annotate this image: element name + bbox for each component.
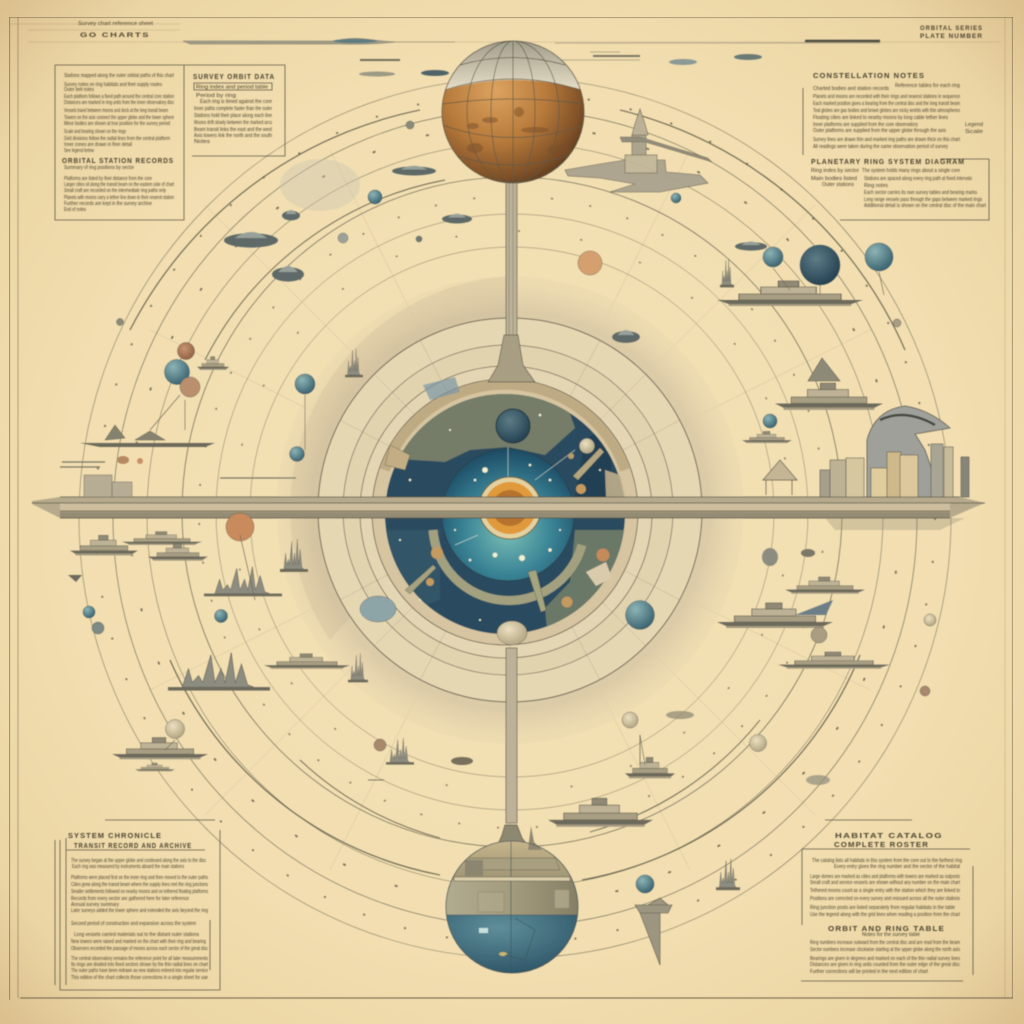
text panel: top left: Notes (194, 139, 211, 145)
text panel: bottom right: Small craft and service vessels are shown without any number on the main chart (810, 880, 961, 886)
text panel: top left: Each platform follows a fixed path around the central core station (64, 94, 174, 100)
text panel: top left (55, 65, 285, 220)
text panel: bottom left: Platforms were placed first on the inner ring and then moved to the outer paths (71, 875, 208, 881)
text panel: top left: Further records are kept in the survey archive (64, 201, 152, 207)
text panel: bottom right: The catalog lists all habitats in this system from the core out to the farthest ring (812, 858, 962, 864)
text panel: bottom left: Later surveys added the lower sphere and extended the axis beyond the ring (71, 908, 208, 914)
text panel: bottom right: Further corrections will be printed in the next edition of chart (810, 969, 929, 975)
text panel: top left: Grid divisions follow the radial lines from the central platform (64, 136, 170, 142)
header labels: PLATE NUMBER (920, 34, 983, 40)
left side ships (60, 357, 414, 771)
text panel: top left: Minor bodies are shown at true position for the survey period (64, 121, 170, 127)
text panel: top right: Legend (965, 122, 983, 128)
text panel: bottom right (801, 820, 973, 981)
text panel: bottom right: Notes for the survey table (862, 932, 920, 938)
text panel: top left: SURVEY ORBIT DATA (193, 74, 275, 81)
text panel: top right: CONSTELLATION NOTES (813, 73, 925, 80)
text panel: top left: Towers on the axis connect the upper globe and the lower sphere (64, 115, 174, 121)
text panel: top right: Main bodies listed (811, 176, 857, 182)
text panel: top left: Inner zones are drawn in finer detail (64, 142, 132, 148)
transit beam (32, 497, 985, 518)
text panel: bottom right: Sector numbers increase clockwise starting at the upper globe along the north axis (810, 947, 960, 953)
right side ships (548, 242, 890, 827)
header labels (78, 21, 983, 40)
header labels: ORBITAL SERIES (920, 26, 983, 32)
text panel: top right: Planets and moons are recorded with their rings and nearest stations in sequence (813, 94, 960, 100)
text panel: bottom right: HABITAT CATALOG (835, 833, 943, 840)
text panel: top left: ORBITAL STATION RECORDS (62, 158, 174, 165)
text panel: top right: Ring notes (864, 183, 888, 189)
text panel: top left: Summary of ring positions by sector (64, 165, 134, 171)
text panel: bottom right: Large domes are marked as cities and platforms with towers are marked as outposts (810, 874, 960, 880)
text panel: top right: Outer stations (822, 182, 854, 188)
text panel: top right: Outer platforms are supplied from the upper globe through the axis (813, 128, 946, 134)
text panel: top left: Planets with moons carry a tether line down to their nearest station (64, 195, 174, 201)
text panel: bottom right: Bearings are given in degrees and marked on each of the thin radial survey lines (810, 956, 960, 962)
text panel: bottom right: Every entry gives the ring number and the sector of the habitat (834, 864, 961, 870)
text panel: top right: PLANETARY RING SYSTEM DIAGRAM (811, 159, 965, 166)
text panel: bottom right: Ring junction posts are listed separately from regular habitats in the table (810, 905, 955, 911)
top globe with stem (440, 40, 590, 382)
text panel: bottom left: This edition of the chart collects those corrections in a single sheet for use (71, 975, 208, 981)
text panel: top right: Scale (965, 129, 983, 135)
text panel: bottom left: Observers recorded the passage of moons across each sector of the great disc (71, 946, 208, 952)
text panel: top left: Stations hold their place along each line (194, 113, 272, 119)
text panel: top left: Survey notes on ring habitats and their supply routes (64, 82, 162, 88)
text panel: top left: Scale and bearing shown on the rings (64, 129, 126, 135)
text panel: bottom right: Distances are given in ring units counted from the outer edge of the great disc (810, 962, 960, 968)
text panel: top right: Survey lines are drawn thin and marked ring paths are drawn thick on this chart (813, 137, 961, 143)
orbit rings (79, 78, 951, 960)
text panel: top right: Charted bodies and station records (813, 86, 889, 92)
text panel: bottom left: The survey began at the upper globe and continued along the axis to the disc (71, 858, 206, 864)
text panel: top right: The system holds many rings about a single core (862, 168, 960, 174)
header labels: Survey chart reference sheet (78, 21, 154, 27)
text panel: bottom left: SYSTEM CHRONICLE (68, 833, 162, 840)
text panel: top right: Each sector carries its own survey tables and bearing marks (864, 190, 977, 196)
bottom globe with stem (445, 648, 580, 977)
text panel: bottom right: Positions are corrected on every survey and reissued across all the outer stations (810, 896, 960, 902)
text panel: bottom right: ORBIT AND RING TABLE (828, 926, 945, 933)
lower ring around core (433, 530, 582, 601)
text panel: bottom left: Smaller settlements followed on nearby moons and on tethered floating platforms (71, 889, 208, 895)
text panel: top left: Axis towers link the north and the south (194, 133, 272, 139)
header labels: GO CHARTS (80, 33, 150, 39)
top strip vessels (183, 38, 880, 76)
text panel: top left: Larger cities sit along the transit beam on the eastern side of chart (64, 182, 174, 188)
central and upper small structures (224, 166, 830, 965)
text panel: top left: Inner paths complete faster than the outer (194, 106, 272, 112)
orange centre (479, 477, 541, 539)
text panel: bottom right: COMPLETE ROSTER (834, 842, 929, 849)
text panel: top right: Reference tables for each ring (895, 83, 960, 89)
text panel: bottom right: Tethered moons count as a single entry with the station which they are linked to (810, 888, 960, 894)
text panel: top right: All readings were taken during the same observation period of survey (813, 144, 948, 150)
tether lines (150, 268, 884, 765)
glowing inner core (442, 449, 574, 581)
text panel: bottom left: The outer paths have been redrawn as new stations entered into regular service (71, 968, 208, 974)
text panel: top left: End of notes (64, 207, 86, 213)
text panel: top right: Ring index by sector (811, 168, 859, 174)
text panel: top right (803, 73, 989, 220)
text panel: top right: Stations are spaced along every ring path at fixed intervals (864, 176, 972, 182)
text panel: bottom left: Records from every sector are gathered here for later reference (71, 896, 189, 902)
text panel: top right: Each marked position gives a bearing from the central disc and the long transit beam (813, 101, 960, 107)
text panel: bottom right: Use the legend along with the grid lines when reading a position from the chart (810, 912, 961, 918)
text panel: top left: Platforms are listed by their distance from the core (64, 176, 152, 182)
text panel: top left: Stations mapped along the outer orbital paths of this chart (64, 73, 175, 79)
text panel: top left: Moons drift slowly between the marked arcs (194, 120, 272, 126)
text panel: top left: Beam transit links the east and the west (194, 127, 273, 133)
text panel: top left: Vessels travel between moons and dock at the long transit beam (64, 108, 168, 114)
text panel: bottom left: Long vessels carried materials out to the distant outer stations (74, 932, 199, 938)
text panel: top right: Long range vessels pass through the gaps between marked rings (864, 197, 982, 203)
text panel: top right: Floating cities are linked to nearby moons by long cable tether lines (813, 115, 948, 121)
text panel: top left: Period by ring (196, 93, 236, 99)
text panel: top left: Small craft are recorded on the intermediate ring paths only (64, 188, 166, 194)
inner planets and struts (496, 409, 530, 443)
text panel: bottom left: New towers were raised and marked on the chart with their ring and bearing (71, 939, 206, 945)
tower ship (565, 109, 712, 192)
central wash disc (276, 159, 744, 744)
text panel: top left: Each ring is timed against the core (200, 99, 272, 105)
text panel: bottom left: Each ring was measured by instruments aboard the main stations (72, 864, 184, 870)
text panel: top left: Outer belt notes (64, 87, 94, 93)
text panel: bottom left: TRANSIT RECORD AND ARCHIVE (74, 843, 192, 850)
text panel: bottom left (55, 820, 220, 990)
central observatory disc (372, 379, 638, 645)
text panel: bottom left: Annual survey summary (71, 902, 119, 908)
text panel: bottom left: Its rings are divided into fixed sectors shown by the thin radial lines on chart (71, 962, 208, 968)
text panel: top left: Ring index and period table (196, 84, 268, 90)
text panel: top right: Teal globes are gas bodies and brown globes are rocky worlds with thin atmospheres (813, 108, 960, 114)
text panel: top right: Additional detail is shown on the central disc of the main chart (864, 203, 987, 209)
domed city on the right (820, 406, 969, 530)
text panel: top left: See legend below (64, 148, 94, 154)
text panel: top left: Distances are marked in ring units from the inner observatory disc (64, 100, 174, 106)
planets (83, 121, 936, 893)
text panel: bottom left: Second period of construction and expansion across the system (71, 921, 196, 927)
text panel: bottom right: Ring numbers increase outward from the central disc and are read from the beam (810, 940, 960, 946)
text panel: top right: Inner platforms are supplied from the core observatory (813, 122, 918, 128)
text panel: bottom left: Cities grew along the transit beam where the supply lines met the ring junctions (71, 882, 208, 888)
text panel: bottom left: The central observatory remains the reference point for all later measurements (71, 956, 208, 962)
